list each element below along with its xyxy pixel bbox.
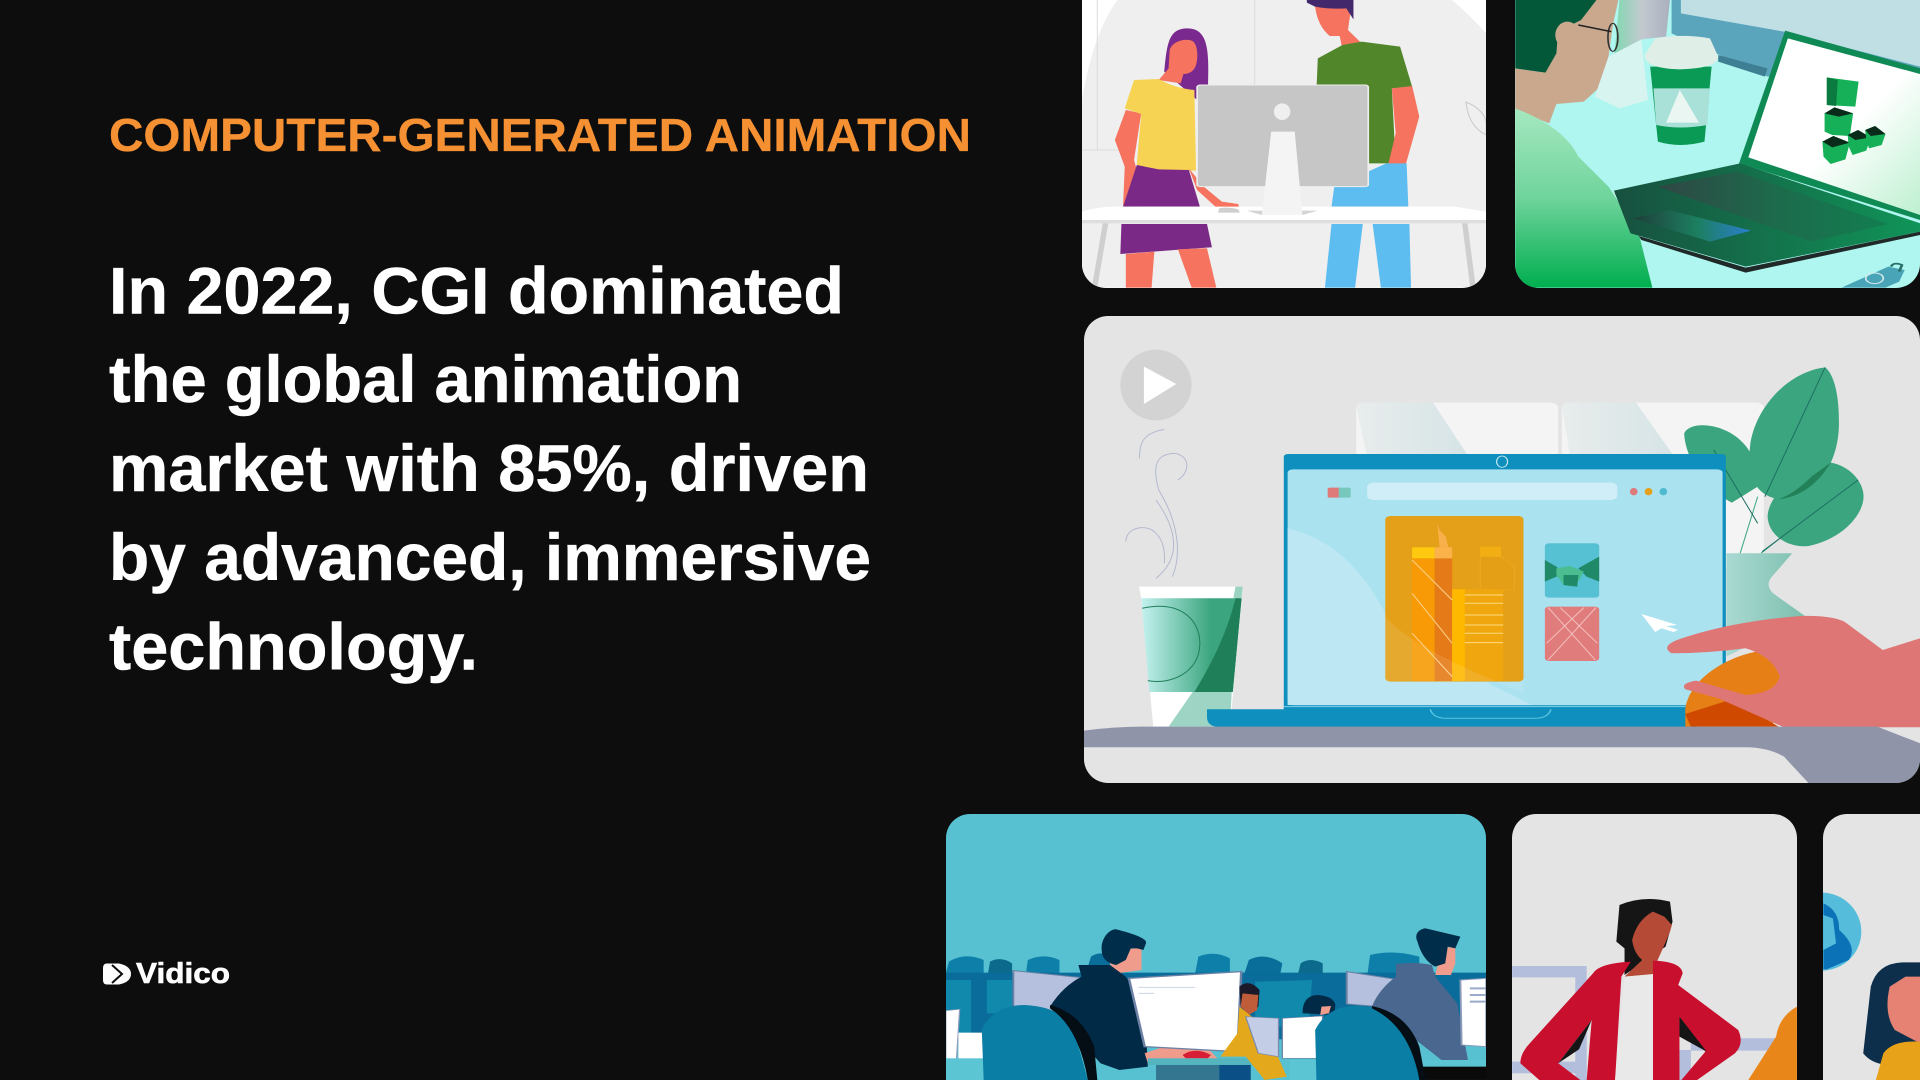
desk (1084, 727, 1920, 783)
worker right (1315, 928, 1486, 1080)
thumbnail: placeholder (1545, 607, 1599, 661)
coffee cup (1139, 587, 1243, 727)
panel: two people at a computer (1082, 0, 1486, 288)
main statement: market with 85%, driven (109, 431, 869, 505)
figure: man (1307, 0, 1419, 288)
eyebrow heading: COMPUTER-GENERATED ANIMATION (109, 109, 971, 161)
figure: woman (1115, 28, 1240, 288)
main statement: In 2022, CGI dominated (109, 254, 844, 328)
logo: Vidico (103, 958, 230, 990)
main statement (109, 254, 871, 684)
desk (1082, 207, 1486, 288)
panel: laptop on desk with play button (1084, 316, 1920, 783)
panel: man in red jacket (1512, 814, 1797, 1080)
thumbnail: handshake (1545, 543, 1599, 598)
worker centre (1220, 983, 1335, 1080)
laptop (1614, 31, 1920, 273)
logo: Vidico: Vidico (136, 958, 230, 990)
background windows (1356, 403, 1764, 569)
panel: woman with avatar (1823, 814, 1920, 1080)
main statement: by advanced, immersive (109, 520, 871, 594)
thumbnail: buildings (1385, 516, 1523, 693)
panel: person at green laptop (1515, 0, 1920, 288)
green blocks on screen (1822, 77, 1885, 164)
icon: play button (1120, 350, 1192, 420)
panel: office workers at monitors (946, 814, 1486, 1080)
plant (1684, 367, 1864, 553)
coffee cup (1645, 36, 1718, 145)
worker left (982, 929, 1241, 1080)
monitor (1197, 85, 1368, 215)
background frame (1512, 966, 1797, 1080)
figure: man (1520, 899, 1741, 1080)
main statement: the global animation (109, 342, 742, 416)
steam (1126, 429, 1187, 578)
icon: avatar badge (1823, 892, 1862, 971)
person (1515, 0, 1686, 288)
back row of chairs (946, 953, 1486, 1040)
mouse (1685, 652, 1781, 727)
hand (1667, 616, 1920, 727)
keychain tag (1842, 264, 1905, 288)
orange sleeve (1748, 1007, 1797, 1080)
icon: cursor (1641, 614, 1678, 632)
figure: woman (1863, 962, 1920, 1080)
vase (1726, 553, 1806, 657)
laptop (1207, 454, 1726, 727)
main statement: technology. (109, 610, 478, 684)
monitors left (946, 971, 1088, 1080)
desk centre (1148, 1058, 1258, 1080)
